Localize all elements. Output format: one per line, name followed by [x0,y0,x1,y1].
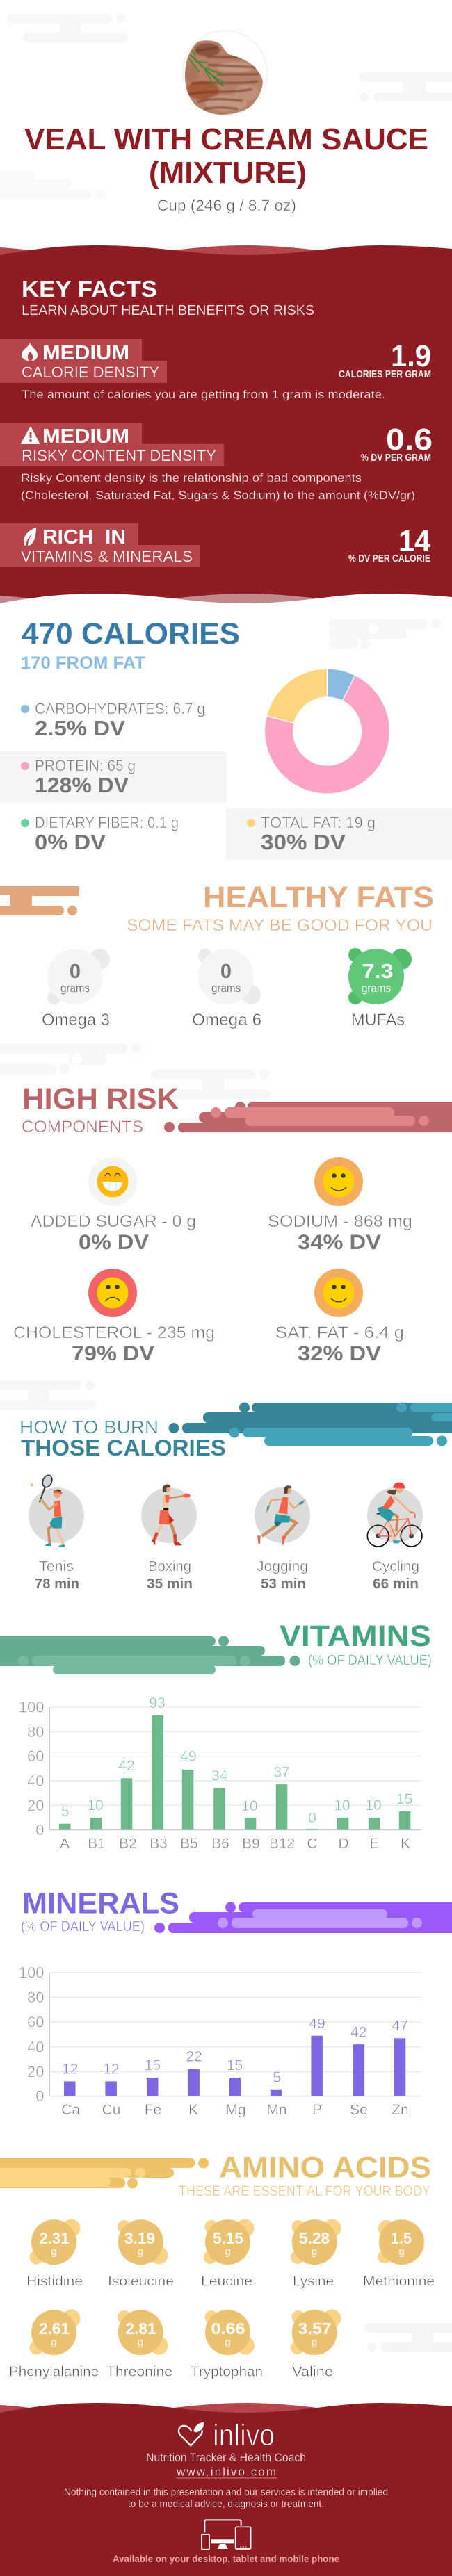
activity: tennis: Tenis [39,1559,74,1574]
MUFAs: grams [362,981,391,995]
panel: minerals [19,1886,452,2118]
bar chart: vitamins: 37 [273,1764,290,1780]
amino: histidine: Histidine [26,2274,83,2290]
activity: cycling [367,1483,423,1592]
disclaimer: to be a medical advice, diagnosis or treatment. [128,2499,324,2510]
calorie density block: 1.9 [391,339,431,373]
high risk heading: HIGH RISK [22,1082,179,1116]
MUFAs [348,948,412,1029]
icon: warning triangle [22,427,39,443]
panel: footer [0,2403,452,2576]
omega 6: Omega 6 [192,1011,261,1029]
legend: protein [0,751,227,803]
donut chart [265,669,390,794]
activity: boxing [141,1484,197,1592]
legend: protein: PROTEIN: 65 g [35,757,136,774]
omega 6 [192,949,261,1029]
decorative background cloud: hero left [7,14,128,42]
icon: tennis player [31,1474,65,1547]
bar chart: minerals: 15 [227,2057,243,2073]
amino: tryptophan: 0.66 [211,2320,245,2338]
amino: histidine: 2.31 [39,2229,70,2247]
amino: phenylalanine: Phenylalanine [9,2365,99,2380]
bar chart: vitamins: B6 [211,1836,229,1852]
panel: high risk components [13,1082,452,1365]
added sugar [31,1157,196,1254]
disclaimer [64,2487,388,2510]
MUFAs: MUFAs [351,1011,405,1029]
amino: valine [291,2309,341,2380]
added sugar: 0% DV [79,1231,149,1254]
icon: leaf [24,528,36,546]
amino: lysine: Lysine [293,2274,334,2290]
amino: threonine: g [138,2336,143,2348]
bar chart: minerals: P [312,2102,322,2118]
activity: jogging [255,1485,310,1592]
amino: lysine [291,2219,341,2290]
rich in vitamins and minerals block [0,523,430,567]
cholesterol: 79% DV [72,1342,154,1365]
decorative cloud [329,619,441,649]
MUFAs: 7.3 [362,961,394,983]
vitamins subheading: (% OF DAILY VALUE) [308,1653,432,1668]
rich in vitamins and minerals block: % DV PER CALORIE [348,553,430,564]
bar chart: vitamins: 60 [27,1747,45,1765]
legend: total fat: 30% DV [261,830,346,854]
bar chart: vitamins: B3 [150,1836,168,1852]
amino: leucine: Leucine [201,2274,252,2290]
bar chart: vitamins: 20 [27,1797,45,1814]
decorative teal cloud [168,1403,452,1446]
legend: dietary fiber: 0% DV [35,830,106,854]
amino: leucine: g [225,2246,231,2258]
amino: histidine: g [51,2246,57,2258]
risky content density block: (Cholesterol, Saturated Fat, Sugars & Sodium) to the amount (%DV/gr). [21,489,419,502]
calorie density block: CALORIE DENSITY [22,364,159,381]
risky content density block: RISKY CONTENT DENSITY [22,447,216,464]
amino: leucine: 5.15 [213,2229,243,2247]
bar chart: vitamins: 93 [149,1695,166,1711]
amino: methionine: g [398,2246,405,2258]
bar chart: vitamins: A [60,1836,70,1852]
amino: phenylalanine: 2.61 [39,2320,70,2338]
bar chart: vitamins: K [401,1836,410,1852]
decorative background cloud: hero lower left [0,170,106,199]
amino: isoleucine: g [138,2246,143,2258]
bar chart: vitamins: 100 [19,1699,45,1715]
amino acids heading: AMINO ACIDS [219,2151,431,2185]
legend: protein: 128% DV [35,773,129,797]
bar chart: minerals [19,1964,421,2118]
icon: flame [22,343,38,361]
rich in vitamins and minerals block: VITAMINS & MINERALS [21,548,193,565]
risky content density block: 0.6 [386,423,433,457]
amino: threonine: 2.81 [125,2320,156,2338]
sodium [268,1157,412,1254]
title: (MIXTURE) [149,156,307,190]
bar chart: vitamins: 42 [118,1758,135,1774]
bar chart: minerals: Ca [61,2102,80,2118]
icon: boxer [151,1484,191,1545]
serving size: Cup (246 g / 8.7 oz) [157,197,296,214]
amino: methionine: Methionine [363,2274,435,2290]
bar chart: vitamins: 49 [180,1749,197,1765]
tagline: Nutrition Tracker & Health Coach [146,2452,306,2464]
components subheading: COMPONENTS [22,1118,143,1136]
bar chart: vitamins: B2 [119,1836,137,1852]
bar chart: minerals: Zn [392,2102,409,2118]
amino: lysine: 5.28 [299,2229,330,2247]
vitamins heading: VITAMINS [280,1620,431,1653]
amino: isoleucine: 3.19 [124,2229,155,2247]
calorie density block: MEDIUM [42,342,129,364]
bar chart: vitamins: 5 [61,1804,70,1820]
decorative green cloud [0,1636,300,1674]
bar chart: minerals: Fe [145,2102,161,2118]
bar chart: minerals: 20 [27,2063,45,2080]
icon: jogger [257,1485,305,1545]
rich in vitamins and minerals block: RICH IN [42,526,126,548]
amino: valine: g [312,2336,317,2348]
bar chart: vitamins: 10 [334,1798,350,1813]
calories heading: 470 CALORIES [22,617,240,651]
bar chart: vitamins: 80 [27,1723,45,1741]
bar chart: minerals: 49 [309,2016,325,2032]
key facts heading: KEY FACTS [22,277,157,302]
risky content density block [0,423,433,502]
bar chart: vitamins: B12 [269,1836,295,1852]
omega 3 [42,949,110,1029]
bar chart: vitamins: 10 [87,1798,104,1813]
healthy fats subheading: SOME FATS MAY BE GOOD FOR YOU [127,916,433,935]
amino: phenylalanine: g [51,2336,57,2348]
saturated fat [275,1269,404,1365]
calorie density block: The amount of calories you are getting from 1 gram is moderate. [22,388,385,401]
bar chart: minerals: 42 [350,2025,366,2041]
website link: www.inlivo.com [176,2465,276,2479]
panel: vitamins [0,1620,432,1852]
activity: jogging: 53 min [261,1576,306,1592]
hero: food image of grilled veal steak [182,31,267,117]
activity: tennis [29,1474,84,1592]
panel: key facts [0,245,452,615]
risky content density block: MEDIUM [42,425,129,448]
amino: tryptophan: Tryptophan [191,2365,263,2380]
activity: jogging: Jogging [257,1559,308,1574]
bar chart: minerals: K [188,2102,198,2118]
activity: tennis: 78 min [35,1576,79,1592]
saturated fat: 32% DV [298,1342,381,1365]
amino: isoleucine [108,2219,174,2290]
decorative cloud beside high risk [150,1070,271,1099]
calories from fat: 170 FROM FAT [21,653,145,673]
amino: isoleucine: Isoleucine [108,2274,174,2290]
activity: cycling: Cycling [372,1559,419,1574]
omega 6: 0 [220,961,232,983]
bar chart: minerals: Mg [225,2102,246,2118]
bar chart: vitamins: 34 [211,1768,227,1784]
amino: leucine [201,2219,255,2290]
sodium: 34% DV [298,1231,381,1254]
title [24,123,428,190]
legend: dietary fiber [21,814,179,854]
key facts subheading: LEARN ABOUT HEALTH BENEFITS OR RISKS [22,302,314,318]
bar chart: minerals: 22 [186,2049,202,2065]
decorative cloud above burn section [0,1380,96,1410]
bar chart: vitamins: D [338,1836,349,1852]
bar chart: minerals: 12 [103,2062,120,2078]
disclaimer: Nothing contained in this presentation and our services is intended or implied [64,2487,388,2498]
minerals heading: MINERALS [22,1886,179,1920]
amino: histidine [26,2219,83,2290]
bar chart: minerals: 15 [145,2057,161,2073]
panel: amino acids [0,2151,435,2380]
bar chart: vitamins: 15 [396,1791,412,1807]
amino: methionine: 1.5 [391,2229,412,2247]
amino: threonine: Threonine [106,2365,172,2380]
bar chart: minerals: Se [350,2102,368,2118]
panel: how to burn those calories: THOSE CALORIES [21,1435,226,1460]
added sugar: ADDED SUGAR - 0 g [31,1212,196,1231]
cholesterol: CHOLESTEROL - 235 mg [13,1323,215,1342]
amino: methionine [363,2219,435,2290]
bar chart: minerals: 12 [62,2062,78,2078]
activity: cycling: 66 min [373,1576,419,1592]
bar chart: vitamins: 0 [35,1821,45,1839]
bar chart: vitamins: 0 [308,1810,316,1826]
burn heading: HOW TO BURN [19,1417,159,1437]
availability note: Available on your desktop, tablet and mobile phone [113,2553,339,2564]
decorative yellow cloud [0,2158,209,2188]
activity: boxing: 35 min [147,1576,193,1592]
bar chart: vitamins: E [369,1836,380,1852]
cholesterol [13,1269,215,1365]
bar chart: vitamins: 10 [241,1798,258,1814]
amino: phenylalanine [9,2309,99,2380]
legend: total fat: TOTAL FAT: 19 g [261,814,376,831]
rich in vitamins and minerals block: 14 [398,524,430,558]
omega 3: grams [60,981,90,995]
bar chart: minerals: 5 [273,2070,281,2086]
minerals subheading: (% OF DAILY VALUE) [21,1919,145,1934]
title: VEAL WITH CREAM SAUCE [24,123,428,156]
amino: threonine [106,2310,172,2380]
bar chart: vitamins: 40 [27,1772,45,1789]
legend: total fat [226,808,452,860]
calorie density block: CALORIES PER GRAM [339,369,431,380]
legend: dietary fiber: DIETARY FIBER: 0.1 g [35,814,179,831]
bar chart: vitamins: B5 [180,1836,198,1852]
sodium: SODIUM - 868 mg [268,1212,412,1231]
amino: tryptophan: g [225,2336,231,2348]
bar chart: minerals: 60 [27,2013,45,2031]
amino: tryptophan [191,2310,263,2380]
decorative red cloud [164,1102,452,1132]
icon: desktop tablet and phone [202,2520,251,2550]
amino: valine: 3.57 [298,2320,331,2338]
legend: carbohydrates: 2.5% DV [35,716,125,740]
omega 3: 0 [70,961,81,983]
bar chart: minerals: 100 [19,1964,45,1981]
risky content density block: % DV PER GRAM [361,453,431,464]
bar chart: vitamins: B9 [242,1836,260,1852]
bar chart: minerals: 47 [392,2018,408,2034]
panel: how to burn those calories [19,1403,452,1592]
decorative purple cloud [154,1902,452,1933]
omega 3: Omega 3 [42,1011,110,1029]
panel: calories [0,617,452,860]
logo: heart with leaf [179,2422,204,2445]
panel: healthy fats [0,881,434,1029]
bar chart: vitamins [19,1695,421,1852]
decorative background cloud: hero right [358,72,452,101]
bar chart: minerals: 80 [27,1989,45,2006]
bar chart: vitamins: C [307,1836,318,1852]
bar chart: vitamins: B1 [88,1836,106,1852]
icon: cyclist [367,1483,422,1547]
bar chart: vitamins: 10 [365,1798,382,1813]
logo wordmark: inlivo [213,2418,275,2452]
bar chart: minerals: 0 [35,2087,45,2105]
decorative orange cloud [0,886,79,915]
bar chart: minerals: 40 [27,2038,45,2056]
decorative cloud above high risk [0,1043,142,1075]
legend: carbohydrates: CARBOHYDRATES: 6.7 g [35,700,205,717]
risky content density block: Risky Content density is the relationship of bad components [21,471,362,484]
amino: valine: Valine [292,2365,333,2380]
amino: lysine: g [312,2246,317,2258]
bar chart: minerals: Cu [102,2102,120,2118]
calorie density block [0,339,431,401]
bar chart: minerals: Mn [266,2102,287,2118]
activity: boxing: Boxing [148,1559,191,1574]
legend: carbohydrates [21,700,205,740]
healthy fats heading: HEALTHY FATS [203,881,434,914]
omega 6: grams [211,981,241,995]
decorative cloud in amino section [364,2323,452,2352]
saturated fat: SAT. FAT - 6.4 g [275,1323,404,1342]
